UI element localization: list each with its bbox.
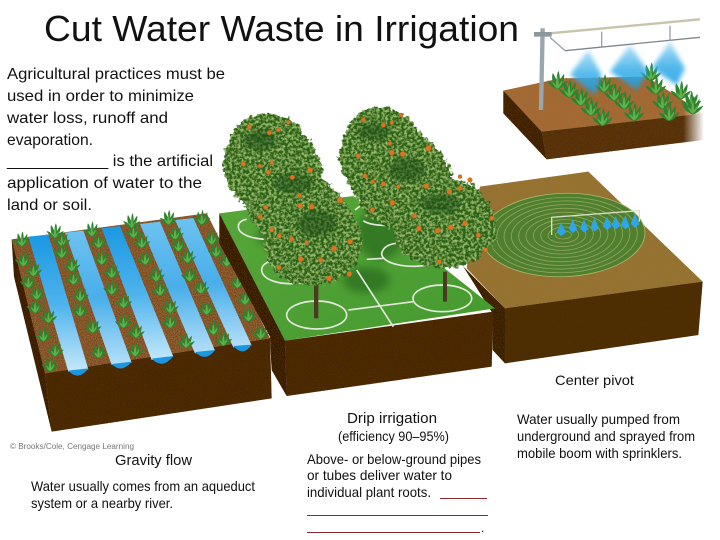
text: drip irrigation description with blanks: Above- or below-ground pipes xyxy=(307,451,481,467)
intro text block: evaporation. xyxy=(7,132,93,149)
text: gravity flow description: Water usually comes from an aqueduct xyxy=(31,478,255,494)
water sprays xyxy=(570,42,685,95)
intro text block: ___________ is the artificial xyxy=(6,153,213,170)
soil block xyxy=(463,172,703,363)
label: drip irrigation: (efficiency 90–95%) xyxy=(338,428,449,444)
text: drip irrigation description with blanks: . xyxy=(481,521,484,535)
intro text block: land or soil. xyxy=(7,197,92,214)
text: center pivot description: underground and sprayed from xyxy=(517,428,695,444)
drip tubing rings xyxy=(238,203,472,329)
intro text block xyxy=(6,66,225,214)
text: gravity flow description xyxy=(31,478,255,511)
tree trunks xyxy=(314,272,447,318)
circular crop field xyxy=(480,191,646,279)
dark foliage shading xyxy=(243,123,460,237)
crop rows xyxy=(547,62,703,126)
text: drip irrigation description with blanks: or tubes deliver water to xyxy=(307,467,452,483)
title: Cut Water Waste in Irrigation xyxy=(44,8,519,49)
intro text block: water loss, runoff and xyxy=(6,110,168,127)
pivot boom with sprinkler drops xyxy=(552,211,639,236)
label: center pivot: Center pivot xyxy=(555,372,634,388)
soil block xyxy=(12,213,272,432)
text: drip irrigation description with blanks xyxy=(307,451,488,535)
label: gravity flow: Gravity flow xyxy=(115,452,192,469)
tree shadows on grass xyxy=(257,207,403,293)
copyright credit: © Brooks/Cole, Cengage Learning xyxy=(10,442,134,451)
illustration: gravity flow plot xyxy=(12,210,272,432)
orange trees xyxy=(223,107,497,286)
text: center pivot description xyxy=(517,411,695,461)
sprinkler boom and post xyxy=(534,19,700,110)
text: drip irrigation description with blanks: individual plant roots. xyxy=(307,484,431,500)
intro text block: used in order to minimize xyxy=(7,88,194,105)
text: center pivot description: mobile boom with sprinklers. xyxy=(517,445,682,461)
label: drip irrigation: Drip irrigation xyxy=(347,410,437,427)
water furrows xyxy=(28,218,252,376)
intro text block: application of water to the xyxy=(7,175,202,192)
soil block and grass xyxy=(219,196,495,396)
illustration: center pivot plot xyxy=(463,172,703,363)
oranges xyxy=(241,113,494,281)
illustration: sprinkler plot xyxy=(503,19,704,159)
label: drip irrigation xyxy=(338,410,449,444)
text: gravity flow description: system or a nearby river. xyxy=(31,495,173,511)
crop rows xyxy=(13,210,269,372)
soil block xyxy=(503,77,704,159)
intro text block: Agricultural practices must be xyxy=(7,66,225,83)
illustration: drip irrigation plot xyxy=(219,107,497,396)
text: center pivot description: Water usually pumped from xyxy=(517,411,680,427)
